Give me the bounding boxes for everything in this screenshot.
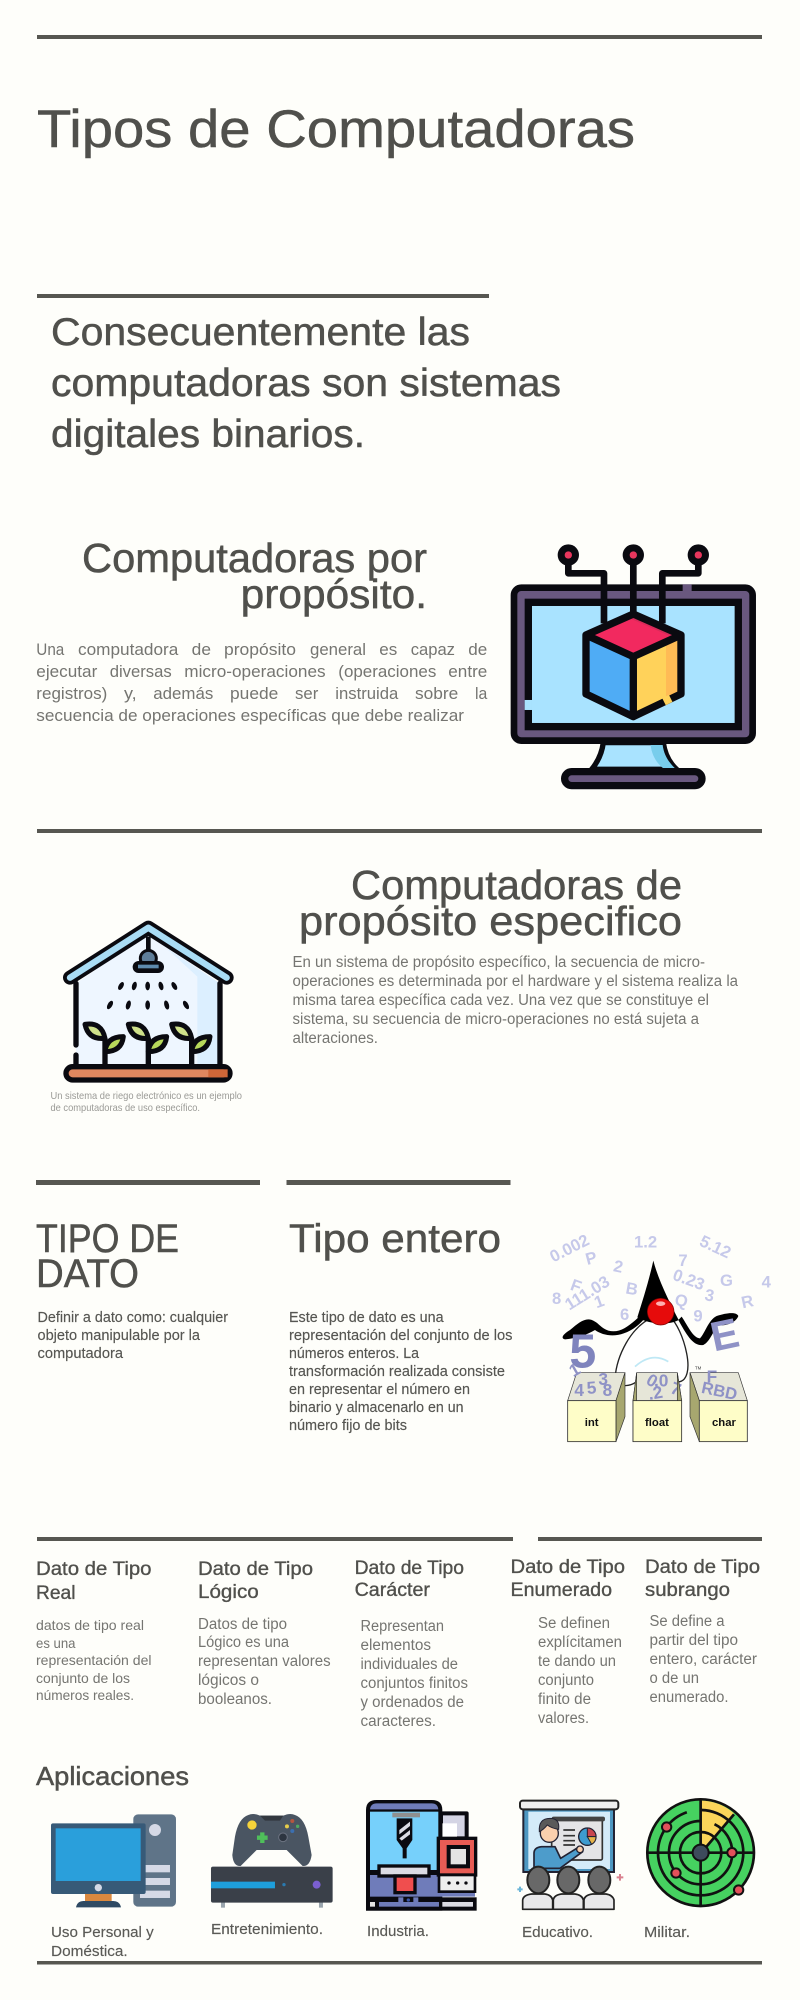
column: dato de tipo subrango: entero, carácter xyxy=(650,1651,757,1668)
text block: propósito específico: En un sistema de propósito específico, la secuencia de micro- xyxy=(292,954,705,971)
column: dato de tipo real: es una xyxy=(36,1635,76,1651)
text block: definición de dato: Definir a dato como: cualquier xyxy=(38,1310,228,1326)
illustration: data types mascot and boxes: 1 xyxy=(565,1358,584,1381)
text block: tipo entero: en representar el número en xyxy=(289,1382,470,1398)
text block: tipo entero: binario y almacenarlo en un xyxy=(289,1400,464,1416)
heading: aplicaciones: Aplicaciones xyxy=(36,1761,189,1791)
intro statement: Consecuentemente las xyxy=(51,311,470,354)
icon: greenhouse with irrigation xyxy=(66,928,230,1080)
column: dato de tipo lógico: Dato de Tipo xyxy=(198,1558,313,1580)
text block: propósito general: computadora xyxy=(78,640,179,659)
heading: computadoras de propósito específico xyxy=(299,862,682,944)
text block: propósito general: secuencia de operaciones específicas que debe realizar xyxy=(36,706,464,725)
text block: tipo entero: Este tipo de dato es una xyxy=(289,1310,445,1326)
illustration: data types mascot and boxes: 3 xyxy=(598,1369,608,1389)
illustration: data types mascot and boxes: Q xyxy=(673,1290,689,1311)
text block: propósito general: y, xyxy=(124,684,137,703)
illustration: data types mascot and boxes: F xyxy=(707,1367,717,1387)
column: dato de tipo enumerado: Dato de Tipo xyxy=(510,1556,625,1578)
illustration: data types mascot and boxes: B xyxy=(624,1279,639,1299)
heading: tipo entero: Tipo entero xyxy=(289,1217,501,1261)
illustration: data types mascot and boxes: 9 xyxy=(693,1307,703,1326)
column: dato de tipo enumerado: finito de xyxy=(538,1691,591,1708)
column: dato de tipo carácter: individuales de xyxy=(360,1656,458,1673)
illustration: data types mascot and boxes: 5 xyxy=(569,1324,596,1378)
column: dato de tipo lógico xyxy=(198,1558,331,1708)
text block: tipo entero: números enteros. La xyxy=(289,1346,420,1362)
column: dato de tipo lógico: lógicos o xyxy=(198,1672,259,1689)
icon: classroom presentation xyxy=(517,1801,623,1909)
illustration: data types mascot and boxes: 4 xyxy=(574,1380,584,1400)
heading: computadoras por propósito: Computadoras por xyxy=(82,535,427,581)
illustration: data types mascot and boxes: 4 xyxy=(762,1272,772,1291)
column: dato de tipo subrango xyxy=(645,1556,760,1706)
column: dato de tipo carácter: conjuntos finitos xyxy=(360,1675,468,1692)
column: dato de tipo subrango: o de un xyxy=(650,1670,699,1687)
text block: propósito específico: misma tarea específica cada vez. Una vez que se constituye el xyxy=(292,992,709,1009)
illustration: data types mascot and boxes: char xyxy=(712,1417,737,1429)
icon: desktop computer xyxy=(51,1814,176,1907)
heading: tipo de dato: DATO xyxy=(36,1252,139,1296)
illustration: data types mascot and boxes: 7 xyxy=(678,1251,688,1270)
column: dato de tipo carácter: Carácter xyxy=(355,1579,431,1601)
illustration: data types mascot and boxes: int xyxy=(585,1417,599,1429)
text block: propósito específico: alteraciones. xyxy=(292,1030,378,1047)
column: dato de tipo enumerado xyxy=(510,1556,625,1727)
label: uso personal: Uso Personal y xyxy=(51,1924,154,1941)
text block: definición de dato: objeto manipulable por la xyxy=(38,1328,201,1344)
text block: propósito general: puede xyxy=(230,684,278,703)
intro statement: digitales binarios. xyxy=(51,413,365,456)
column: dato de tipo enumerado: explícitamen xyxy=(538,1634,622,1651)
column: dato de tipo carácter xyxy=(355,1557,468,1730)
column: dato de tipo enumerado: te dando un xyxy=(538,1653,616,1670)
illustration: data types mascot and boxes: float xyxy=(645,1417,669,1429)
illustration: data types mascot and boxes: F xyxy=(568,1275,584,1297)
illustration: data types mascot and boxes xyxy=(547,1230,772,1442)
text block: propósito general: ser xyxy=(295,684,319,703)
column: dato de tipo lógico: Datos de tipo xyxy=(198,1616,287,1633)
illustration: data types mascot and boxes: R xyxy=(740,1291,755,1312)
illustration: data types mascot and boxes: 1.2 xyxy=(634,1232,657,1251)
icon: game console xyxy=(211,1814,333,1908)
illustration: data types mascot and boxes: RBD xyxy=(700,1378,739,1404)
text block: tipo entero xyxy=(289,1310,512,1434)
column: dato de tipo real: datos de tipo real xyxy=(36,1617,144,1633)
text block: tipo entero: transformación realizada consiste xyxy=(289,1364,505,1380)
heading: computadoras de propósito específico: Computadoras de xyxy=(351,862,682,908)
heading: tipo de dato xyxy=(36,1217,179,1296)
text block: propósito específico: operaciones es determinada por el hardware y el sistema realiza la xyxy=(292,973,738,990)
text block: propósito general: de xyxy=(468,640,487,659)
column: dato de tipo lógico: Lógico xyxy=(198,1581,259,1603)
label: uso personal: Doméstica. xyxy=(51,1943,128,1960)
illustration: data types mascot and boxes: 1 xyxy=(592,1291,607,1312)
illustration: data types mascot and boxes: .2 xyxy=(647,1382,664,1404)
illustration: data types mascot and boxes: 0.002 xyxy=(547,1230,592,1266)
illustration: data types mascot and boxes: 8 xyxy=(552,1289,561,1308)
icon: radar xyxy=(647,1799,754,1906)
caption: riego electrónico: Un sistema de riego electrónico es un ejemplo xyxy=(50,1090,242,1102)
illustration: data types mascot and boxes: 8 xyxy=(603,1380,613,1400)
illustration: data types mascot and boxes: P xyxy=(583,1248,599,1269)
text block: definición de dato: computadora xyxy=(38,1346,124,1362)
illustration: data types mascot and boxes: 0 xyxy=(643,1369,661,1392)
text block: definición de dato xyxy=(38,1310,228,1362)
column: dato de tipo enumerado: Se definen xyxy=(538,1615,610,1632)
illustration: data types mascot and boxes: 5.12 xyxy=(697,1231,734,1262)
caption: riego electrónico: de computadoras de uso específico. xyxy=(50,1102,200,1114)
label: industria: Industria. xyxy=(367,1923,429,1940)
text block: tipo entero: representación del conjunto de los xyxy=(289,1328,512,1344)
text block: propósito general: general xyxy=(310,640,366,659)
text block: propósito general: diversas xyxy=(110,662,172,681)
icon: industrial machine xyxy=(366,1800,477,1911)
column: dato de tipo carácter: elementos xyxy=(360,1637,431,1654)
heading: computadoras por propósito: propósito. xyxy=(241,571,427,617)
column: dato de tipo subrango: Se define a xyxy=(650,1613,725,1630)
illustration: data types mascot and boxes: 3 xyxy=(703,1285,716,1306)
text block: propósito general: (operaciones xyxy=(338,662,436,681)
text block: propósito general: instruida xyxy=(335,684,399,703)
column: dato de tipo enumerado: Enumerado xyxy=(510,1579,612,1601)
illustration: data types mascot and boxes: TM xyxy=(695,1365,702,1370)
text block: propósito general: entre xyxy=(448,662,487,681)
text block: propósito general: capaz xyxy=(411,640,455,659)
illustration: data types mascot and boxes: 7 xyxy=(668,1378,684,1400)
illustration: data types mascot and boxes: E xyxy=(706,1309,743,1360)
column: dato de tipo subrango: Dato de Tipo xyxy=(645,1556,760,1578)
text block: propósito general: además xyxy=(153,684,213,703)
column: dato de tipo lógico: booleanos. xyxy=(198,1691,272,1708)
column: dato de tipo carácter: Dato de Tipo xyxy=(355,1557,464,1579)
column: dato de tipo carácter: y ordenados de xyxy=(360,1694,464,1711)
column: dato de tipo enumerado: conjunto xyxy=(538,1672,594,1689)
column: dato de tipo subrango: enumerado. xyxy=(650,1689,728,1706)
text block: tipo entero: número fijo de bits xyxy=(289,1418,407,1434)
icon: monitor with cube xyxy=(514,544,753,786)
column: dato de tipo real: conjunto de los xyxy=(36,1670,130,1686)
illustration: data types mascot and boxes: 6 xyxy=(620,1305,629,1324)
text block: propósito general xyxy=(36,640,488,725)
text block: propósito general: sobre xyxy=(415,684,458,703)
column: dato de tipo carácter: caracteres. xyxy=(360,1713,436,1730)
column: dato de tipo subrango: subrango xyxy=(645,1579,730,1601)
illustration: data types mascot and boxes: 5 xyxy=(586,1377,598,1398)
column: dato de tipo carácter: Representan xyxy=(360,1618,444,1635)
column: dato de tipo real: números reales. xyxy=(36,1687,134,1703)
title: Tipos de Computadoras xyxy=(37,100,635,159)
text block: propósito específico: sistema, su secuencia de micro-operaciones no está sujeta a xyxy=(292,1011,699,1028)
intro statement xyxy=(51,311,561,456)
intro statement: computadoras son sistemas xyxy=(51,362,561,405)
illustration: data types mascot and boxes: 2 xyxy=(612,1256,625,1277)
label: uso personal xyxy=(51,1924,154,1960)
illustration: data types mascot and boxes: G xyxy=(720,1271,733,1290)
column: dato de tipo real xyxy=(36,1558,152,1703)
text block: propósito general: propósito xyxy=(224,640,296,659)
caption: riego electrónico xyxy=(50,1090,242,1114)
heading: tipo de dato: TIPO DE xyxy=(36,1217,179,1261)
text block: propósito general: de xyxy=(192,640,211,659)
text block: propósito general: Una xyxy=(36,640,65,659)
label: entretenimiento: Entretenimiento. xyxy=(211,1921,323,1938)
column: dato de tipo real: representación del xyxy=(36,1652,152,1668)
label: educativo: Educativo. xyxy=(522,1924,593,1941)
heading: computadoras de propósito específico: propósito especifico xyxy=(299,898,682,944)
text block: propósito general: la xyxy=(475,684,488,703)
label: militar: Militar. xyxy=(644,1924,690,1941)
illustration: data types mascot and boxes: .0 xyxy=(654,1371,668,1391)
text block: propósito específico xyxy=(292,954,738,1047)
column: dato de tipo subrango: partir del tipo xyxy=(650,1632,738,1649)
column: dato de tipo real: Real xyxy=(36,1582,76,1604)
text block: propósito general: micro-operaciones xyxy=(184,662,326,681)
text block: propósito general: es xyxy=(379,640,397,659)
column: dato de tipo lógico: Lógico es una xyxy=(198,1634,289,1651)
column: dato de tipo lógico: representan valores xyxy=(198,1653,331,1670)
heading: computadoras por propósito xyxy=(82,535,427,617)
column: dato de tipo real: Dato de Tipo xyxy=(36,1558,152,1580)
text block: propósito general: ejecutar xyxy=(36,662,98,681)
illustration: data types mascot and boxes: 111.03 xyxy=(561,1272,613,1314)
text block: propósito general: registros) xyxy=(36,684,107,703)
column: dato de tipo enumerado: valores. xyxy=(538,1710,589,1727)
illustration: data types mascot and boxes: 0.23 xyxy=(670,1265,707,1294)
